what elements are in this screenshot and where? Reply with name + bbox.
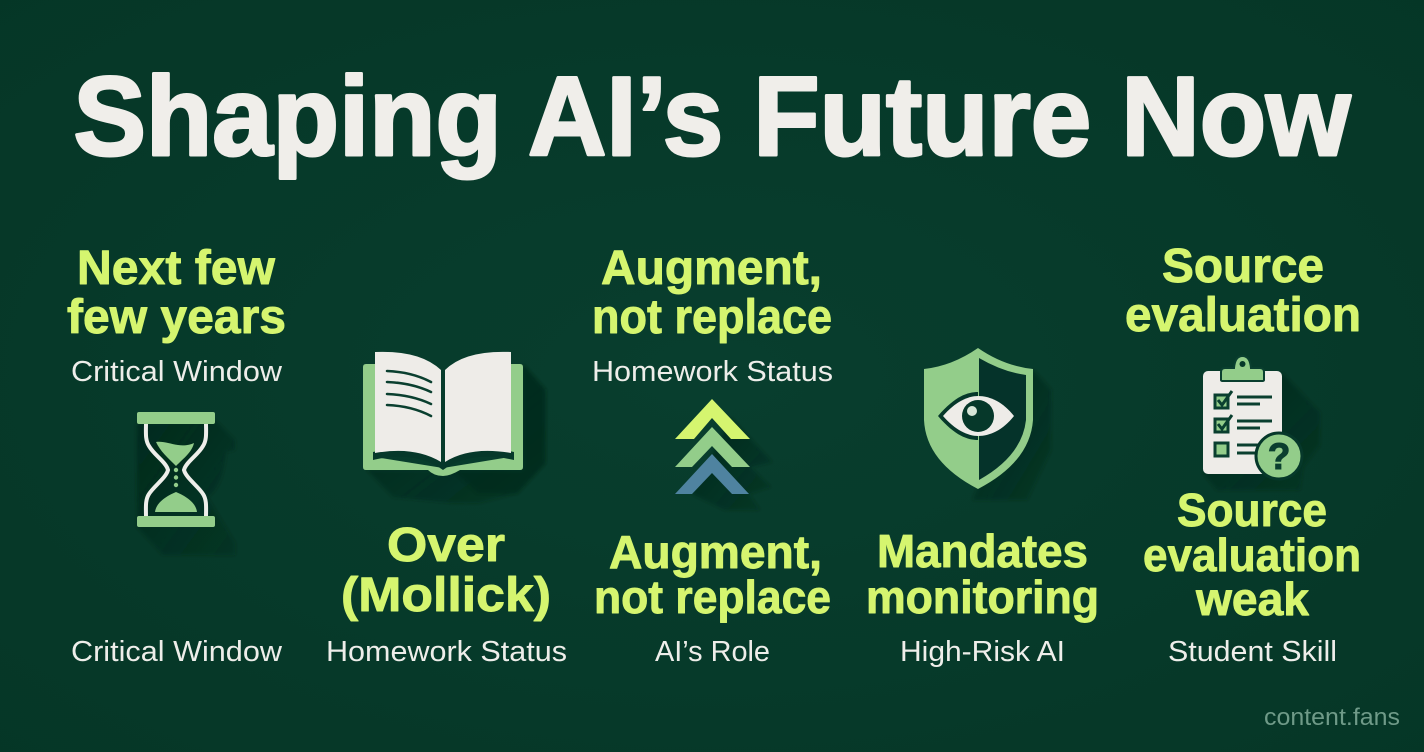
panel: student skill — [1125, 240, 1361, 668]
heading: source evaluation weak: evaluation — [1143, 529, 1361, 581]
heading: augment, not replace: Augment, — [609, 526, 822, 578]
panel: high-risk ai — [866, 348, 1099, 668]
heading: augment, not replace — [592, 242, 832, 344]
heading: over (mollick) — [341, 519, 551, 622]
label: homework status: Homework Status — [326, 636, 567, 668]
heading: source evaluation weak: weak — [1195, 573, 1309, 625]
heading: source evaluation: evaluation — [1125, 289, 1361, 342]
icon: hourglass — [137, 412, 235, 555]
heading: source evaluation: Source — [1162, 240, 1324, 293]
label: high-risk ai: High-Risk AI — [900, 636, 1065, 668]
label: student skill: Student Skill — [1168, 636, 1337, 668]
heading: over (mollick): (Mollick) — [341, 569, 551, 622]
icon: clipboard with question mark — [1203, 356, 1320, 490]
heading: augment, not replace: not replace — [594, 571, 831, 623]
panel: ai's role — [592, 242, 833, 668]
icon: open book — [363, 352, 545, 503]
heading: mandates monitoring — [866, 525, 1099, 623]
panel: homework status — [326, 352, 567, 668]
heading: mandates monitoring: Mandates — [877, 525, 1088, 577]
icon: shield with eye — [924, 348, 1051, 500]
subheading: homework status: Homework Status — [592, 356, 833, 388]
heading: augment, not replace: Augment, — [601, 242, 822, 295]
heading: augment, not replace — [594, 526, 831, 623]
label: ai's role: AI’s Role — [655, 636, 770, 668]
title: Shaping AI’s Future Now — [74, 54, 1351, 179]
heading: next few few years: few years — [67, 291, 286, 344]
watermark: content.fans — [1264, 704, 1400, 731]
heading: mandates monitoring: monitoring — [866, 571, 1099, 623]
heading: next few few years: Next few — [77, 242, 276, 295]
icon: stacked chevrons — [675, 399, 772, 510]
heading: augment, not replace: not replace — [592, 291, 832, 344]
subheading: critical window: Critical Window — [71, 356, 283, 388]
panel: critical window — [67, 242, 286, 668]
heading: next few few years — [67, 242, 286, 344]
heading: source evaluation weak — [1143, 484, 1361, 625]
heading: source evaluation weak: Source — [1177, 484, 1327, 536]
label: critical window: Critical Window — [71, 636, 283, 668]
heading: over (mollick): Over — [387, 519, 505, 572]
icon: clipboard with question mark: ? — [1268, 436, 1290, 477]
heading: source evaluation — [1125, 240, 1361, 342]
